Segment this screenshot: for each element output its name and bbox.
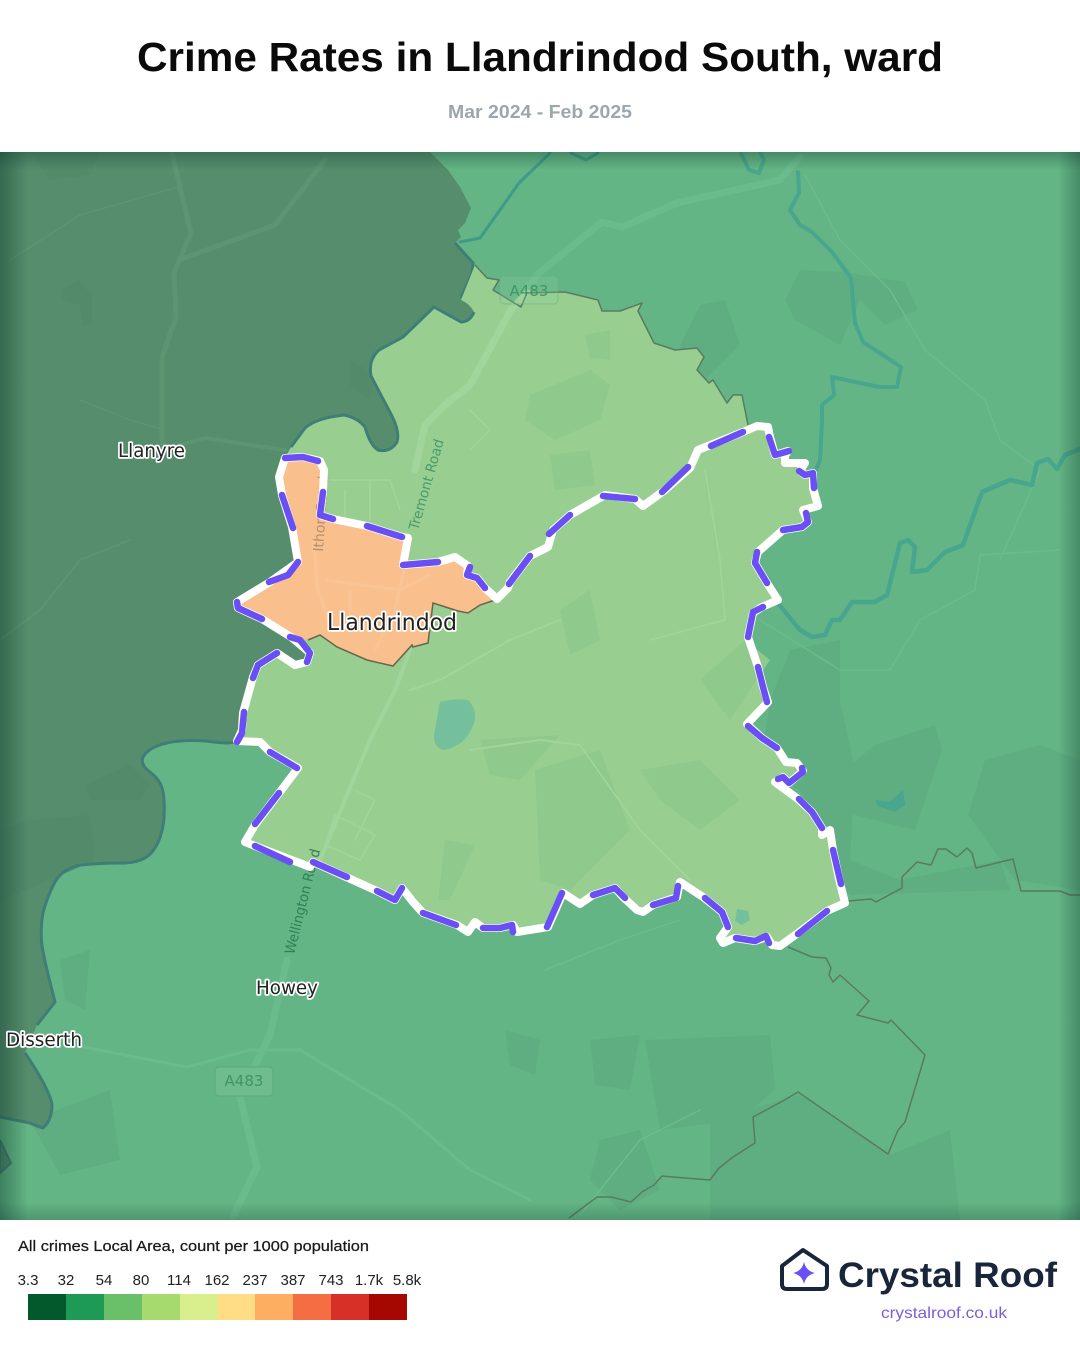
legend tick labels: 114 <box>167 1272 191 1289</box>
legend colour scale <box>28 1294 407 1320</box>
icon: star <box>793 1262 815 1284</box>
title: Crime Rates in Llandrindod South, ward <box>137 34 943 80</box>
legend tick labels: 743 <box>318 1272 344 1289</box>
ward boundary: white outline <box>237 426 845 946</box>
legend tick labels: 5.8k <box>393 1272 422 1289</box>
logo wordmark: Crystal Roof <box>838 1256 1057 1295</box>
legend tick labels: 80 <box>133 1272 149 1289</box>
orange region street detail <box>313 540 430 650</box>
legend tick labels: 3.3 <box>18 1272 38 1289</box>
road label: Ithon Road: Ithon Road <box>311 475 332 552</box>
neighbouring ward outlines <box>475 265 1080 1218</box>
legend tick labels: 1.7k <box>355 1272 384 1289</box>
website link: crystalroof.co.uk <box>881 1305 1008 1322</box>
forest patches inside ward <box>488 649 770 780</box>
place label: Howey: Howey <box>256 977 318 999</box>
icon: house <box>782 1250 827 1289</box>
forest patches on surrounding land <box>30 270 1080 1220</box>
road network <box>600 277 906 1190</box>
logo: Crystal Roof <box>782 1250 1057 1295</box>
legend title: All crimes Local Area, count per 1000 population <box>18 1238 369 1255</box>
region edge along river <box>0 243 473 1128</box>
river edge along light area <box>291 307 474 451</box>
road badge: A483 south <box>215 1067 273 1096</box>
road badge: A483 north <box>500 276 558 304</box>
legend tick labels: 237 <box>242 1272 268 1289</box>
dark region detail <box>64 866 80 874</box>
legend tick labels: 32 <box>58 1272 74 1289</box>
orange region southern outline <box>308 600 495 666</box>
small pond <box>735 909 750 925</box>
small dark sliver bottom left <box>0 1140 11 1173</box>
place label: Llandrindod: Llandrindod <box>327 610 457 636</box>
fish pond east <box>875 790 905 812</box>
subtitle: date range: Mar 2024 - Feb 2025 <box>448 102 632 122</box>
map edge vignette <box>0 152 1080 1220</box>
region: mid-crime light green area <box>237 265 845 946</box>
legend tick labels <box>18 1272 422 1289</box>
rivers <box>460 152 1080 637</box>
place label: Llanyre: Llanyre <box>118 440 185 462</box>
roads inside ward <box>320 293 725 880</box>
legend tick labels: 387 <box>280 1272 306 1289</box>
map panel <box>0 152 1080 1220</box>
place label: Disserth: Disserth <box>6 1029 82 1051</box>
region: high-crime orange area <box>237 457 497 666</box>
region: low-crime dark west <box>0 152 500 1128</box>
legend tick labels: 162 <box>204 1272 230 1289</box>
road badge: A483 north: A483 <box>510 282 548 300</box>
lake <box>434 699 475 750</box>
road badge: A483 south: A483 <box>225 1072 263 1090</box>
road label: Wellington Road: Wellington Road <box>282 847 324 956</box>
ward boundary: purple dashes <box>237 432 841 943</box>
legend tick labels: 54 <box>96 1272 112 1289</box>
road label: Tremont Road: Tremont Road <box>406 437 448 533</box>
